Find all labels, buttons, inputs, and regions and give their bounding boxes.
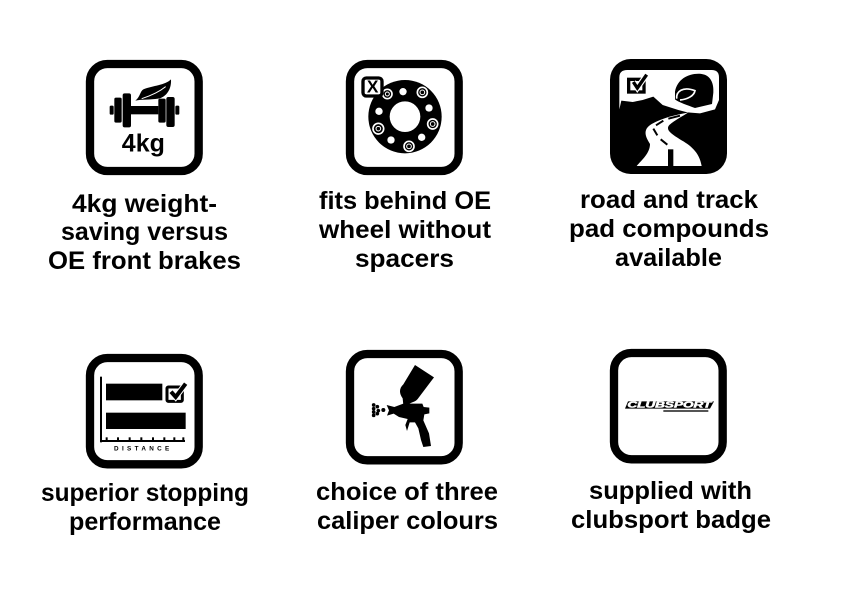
panel: fits behind OE wheel [318, 64, 492, 273]
caption: clubsport badge: supplied with [589, 477, 752, 505]
panel: clubsport badge [571, 353, 771, 534]
caption: clubsport badge [571, 477, 771, 534]
icon: clubsport badge [614, 353, 723, 459]
icon: spray gun [350, 354, 459, 460]
caption: clubsport badge: clubsport badge [571, 506, 771, 534]
icon: stopping distance chart: DISTANCE [114, 445, 173, 452]
caption: superior stopping: performance [69, 508, 221, 536]
caption: road and track pads: road and track [580, 186, 758, 214]
caption: caliper colours: choice of three [316, 478, 498, 506]
panel: caliper colours [316, 354, 498, 535]
caption: road and track pads: pad compounds [569, 215, 769, 243]
caption: superior stopping: superior stopping [41, 479, 249, 507]
caption: fits behind OE wheel: spacers [355, 245, 454, 273]
caption: road and track pads [569, 186, 769, 272]
icon: dumbbell and feather: 4kg [122, 129, 165, 157]
caption: 4kg weight saving: 4kg weight- [72, 190, 217, 218]
caption: 4kg weight saving: OE front brakes [48, 247, 241, 275]
panel: superior stopping [41, 358, 249, 536]
caption: 4kg weight saving [48, 190, 241, 275]
icon: clubsport badge: CLUBSPORT [627, 400, 713, 410]
caption: road and track pads: available [615, 244, 722, 272]
caption: fits behind OE wheel: wheel without [318, 216, 492, 244]
icon: dumbbell and feather [90, 64, 199, 171]
caption: caliper colours [316, 478, 498, 535]
caption: caliper colours: caliper colours [317, 507, 498, 535]
panel: 4kg weight saving [48, 64, 241, 275]
caption: superior stopping [41, 479, 249, 536]
caption: fits behind OE wheel: fits behind OE [319, 187, 491, 215]
icon: wheel spacer disc with X box: X [367, 77, 379, 97]
panel: road and track pads [569, 59, 769, 272]
icon: stopping distance chart [90, 358, 199, 464]
icon: wheel spacer disc with X box [350, 64, 459, 171]
icon: road, helmet and checkbox [610, 59, 727, 174]
caption: 4kg weight saving: saving versus [61, 218, 228, 246]
caption: fits behind OE wheel [318, 187, 492, 273]
